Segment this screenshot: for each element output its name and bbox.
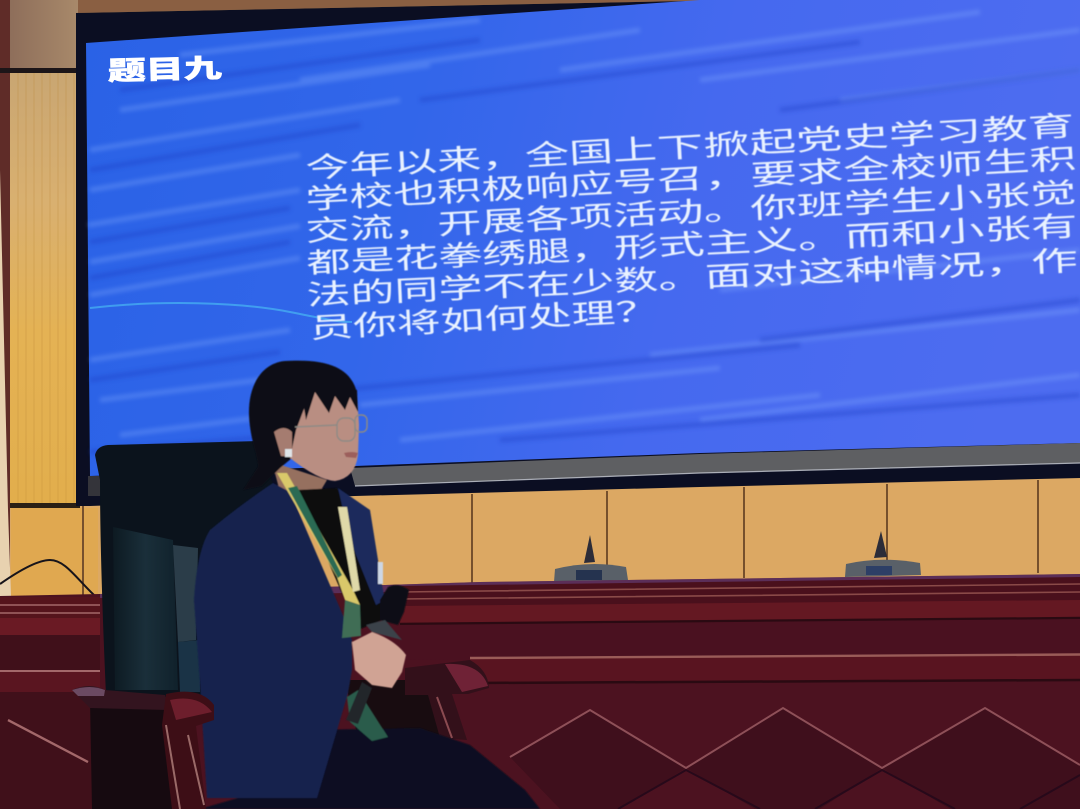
neck xyxy=(272,462,327,495)
turtleneck xyxy=(297,488,382,630)
hands xyxy=(352,632,406,688)
slide question text xyxy=(305,110,1078,344)
glasses xyxy=(295,415,367,441)
desk diamond edges xyxy=(510,708,1080,768)
desk xyxy=(0,574,1080,809)
badge xyxy=(378,562,383,584)
right armrest xyxy=(405,660,489,740)
lips xyxy=(344,452,358,458)
microphone xyxy=(346,585,409,724)
line 1: 今年以来，全国上 xyxy=(305,133,658,184)
line 1 xyxy=(305,110,1075,184)
screen bezel xyxy=(88,443,1080,496)
chair lower cushion xyxy=(113,527,178,690)
line 4 xyxy=(306,210,1078,279)
scarf xyxy=(277,473,388,741)
jacket right lapel xyxy=(338,488,385,605)
desk microphone base right xyxy=(845,531,921,577)
chair base and left armrest xyxy=(72,686,214,809)
chair back xyxy=(95,441,300,700)
line 2: 学校也积极响应号 xyxy=(305,165,658,215)
desk left section xyxy=(0,597,100,809)
projection screen xyxy=(86,0,1080,476)
chair side highlight xyxy=(173,545,198,642)
line 3 xyxy=(305,177,1077,247)
hair xyxy=(243,361,357,490)
ear xyxy=(274,428,292,457)
bangs xyxy=(302,380,358,420)
line 5: 法的同学不在少数 xyxy=(306,264,659,311)
line 2: 召，要求全校师生积 xyxy=(656,143,1077,196)
line 4: 式主义。而和小张有 xyxy=(657,210,1078,262)
chair seat xyxy=(178,640,200,692)
desk diamond panels xyxy=(510,708,1080,809)
chair xyxy=(95,441,300,700)
line 4: 都是花拳绣腿，形 xyxy=(306,231,659,279)
under-arm dark gap xyxy=(345,680,445,748)
cyan wave line xyxy=(90,303,352,322)
line 5 xyxy=(306,245,1078,311)
slide title: 题目九 xyxy=(107,53,222,86)
desk microphone base left xyxy=(554,535,628,582)
person xyxy=(194,361,540,809)
desk diamond shadow lines xyxy=(618,770,1080,809)
line 2 xyxy=(305,143,1077,215)
screen frame xyxy=(76,0,1080,506)
line 1: 下掀起党史学习教育 xyxy=(656,110,1075,164)
earring xyxy=(285,449,292,457)
screen streak pattern xyxy=(88,12,1080,440)
face xyxy=(290,385,359,481)
legs xyxy=(200,728,540,809)
line 5: 。面对这种情况，作 xyxy=(658,245,1078,295)
line 6: 员你将如何处理？ xyxy=(309,295,660,344)
jacket xyxy=(194,483,352,798)
cable xyxy=(0,560,94,595)
line 3: 动。你班学生小张觉 xyxy=(656,177,1077,229)
line 3: 交流，开展各项活 xyxy=(305,198,658,247)
